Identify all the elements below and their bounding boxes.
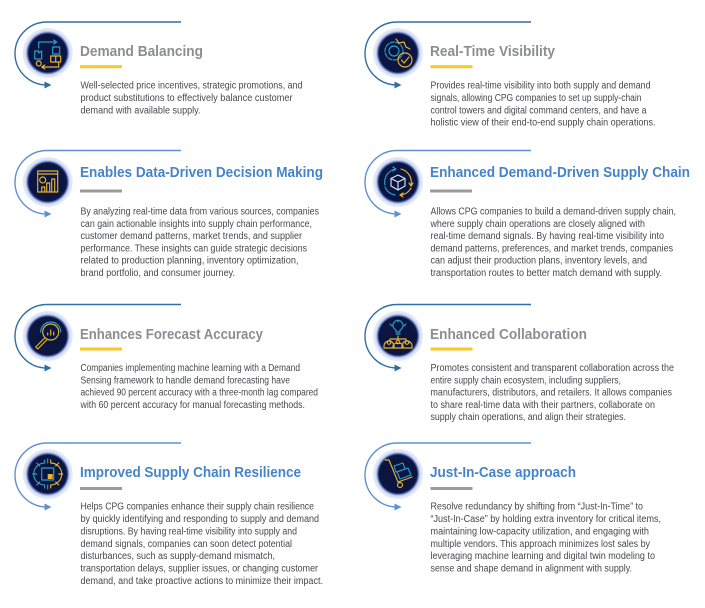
- heading underline: [430, 190, 472, 192]
- text block: Resolve redundancy by shifting from “Just-In-Time” to: [430, 502, 643, 512]
- heading underline: [430, 65, 472, 68]
- text block: entire supply chain ecosystem, including suppliers,: [430, 375, 621, 386]
- text block: [430, 363, 674, 423]
- text block: Promotes consistent and transparent collaboration across the: [430, 363, 674, 374]
- heading: Enables Data-Driven Decision Making: [80, 165, 323, 181]
- text block: [430, 502, 661, 574]
- text block: product substitutions to effectively balance customer: [80, 93, 293, 104]
- arrow: curved connector: [365, 22, 531, 88]
- text block: can gain actionable insights into supply chain performance,: [80, 219, 312, 230]
- text block: transportation routes to better match demand with supply.: [430, 268, 662, 279]
- text block: real-time demand signals. By having real-time visibility into: [430, 231, 664, 242]
- heading: Enhances Forecast Accuracy: [80, 327, 263, 343]
- text block: sense and shape demand in alignment with supply.: [430, 564, 632, 574]
- text block: Allows CPG companies to build a demand-driven supply chain,: [430, 206, 676, 218]
- heading underline: [80, 190, 122, 192]
- panel: Improved Supply Chain Resilience: [15, 443, 323, 587]
- heading: Demand Balancing: [80, 44, 203, 60]
- heading: Enhanced Demand-Driven Supply Chain: [430, 165, 690, 181]
- text block: achieved 90 percent accuracy with a three-month lag compared: [80, 388, 318, 399]
- text block: [430, 206, 676, 279]
- heading underline: [430, 348, 472, 350]
- panel: Just-In-Case approach: [365, 443, 661, 574]
- heading underline: [80, 348, 122, 350]
- text block: [80, 206, 319, 279]
- text block: Helps CPG companies enhance their supply chain resilience: [80, 502, 314, 512]
- icon: hand truck with boxes: [373, 449, 423, 499]
- text block: Well-selected price incentives, strategic promotions, and: [80, 80, 302, 92]
- panel: Enhanced Collaboration: [365, 304, 674, 423]
- heading underline: [430, 487, 472, 490]
- panel: Enhanced Demand-Driven Supply Chain: [365, 150, 690, 279]
- arrow: curved connector: [15, 150, 181, 218]
- text block: disturbances, such as supply-demand mismatch,: [80, 551, 275, 562]
- panel: Demand Balancing: [15, 22, 302, 116]
- text block: to share real-time data with their partners, collaborate on: [430, 400, 655, 411]
- text block: demand patterns, preferences, and market trends, companies: [430, 243, 673, 254]
- text block: control towers and digital command centers, and have a: [430, 105, 647, 116]
- text block: related to production planning, inventory optimization,: [80, 256, 298, 267]
- heading underline: [80, 487, 122, 490]
- text block: transportation delays, supplier issues, or changing customer: [80, 564, 319, 574]
- heading: Improved Supply Chain Resilience: [80, 465, 301, 481]
- icon: gears with check: [373, 28, 423, 78]
- text block: performance. These insights can guide strategic decisions: [80, 243, 307, 254]
- text block: brand portfolio, and consumer journey.: [80, 268, 235, 279]
- arrow: curved connector: [15, 304, 181, 372]
- text block: disruptions. By having real-time visibility into supply and: [80, 526, 297, 537]
- text block: customer demand patterns, market trends, and supplier: [80, 231, 303, 242]
- text block: leveraging machine learning and digital twin modeling to: [430, 551, 655, 562]
- text block: with 60 percent accuracy for manual forecasting methods.: [80, 400, 305, 411]
- text block: where supply chain operations are closely aligned with: [430, 219, 645, 230]
- icon: package in cycle: [373, 157, 423, 207]
- arrow: curved connector: [365, 443, 531, 510]
- text block: [430, 80, 656, 129]
- heading: Real-Time Visibility: [430, 44, 555, 60]
- text block: demand, and take proactive actions to minimize their impact.: [80, 576, 323, 587]
- text block: supply chain operations, and align their strategies.: [430, 412, 626, 423]
- arrow: curved connector: [15, 22, 181, 88]
- text block: holistic view of their end-to-end supply chain operations.: [430, 118, 656, 129]
- icon: analytics dashboard: [23, 157, 73, 207]
- heading underline: [80, 65, 122, 68]
- heading: Just-In-Case approach: [430, 465, 576, 481]
- text block: manufacturers, distributors, and retailers. It allows companies: [430, 388, 672, 399]
- text block: “Just-In-Case” by holding extra inventory for critical items,: [430, 514, 661, 525]
- text block: Companies implementing machine learning with a Demand: [80, 363, 300, 374]
- panel: Real-Time Visibility: [365, 22, 656, 129]
- text block: maintaining low-capacity utilization, and engaging with: [430, 526, 649, 537]
- heading: Enhanced Collaboration: [430, 327, 587, 343]
- arrow: curved connector: [365, 304, 531, 372]
- arrow: curved connector: [15, 443, 181, 510]
- icon: gear with box: [23, 449, 73, 499]
- panel: Enhances Forecast Accuracy: [15, 304, 318, 411]
- text block: by quickly identifying and responding to supply and demand: [80, 514, 319, 525]
- icon: balancing flow: [23, 28, 73, 78]
- icon: light bulb and team: [373, 311, 423, 361]
- panel: Enables Data-Driven Decision Making: [15, 150, 323, 279]
- text block: [80, 502, 323, 587]
- text block: demand signals, companies can soon detect potential: [80, 539, 292, 550]
- text block: signals, allowing CPG companies to set up supply-chain: [430, 93, 642, 104]
- text block: demand with available supply.: [80, 105, 200, 116]
- text block: Sensing framework to handle demand forecasting have: [80, 375, 290, 386]
- text block: [80, 363, 318, 411]
- arrow: curved connector: [365, 150, 531, 218]
- icon: magnifying glass: [23, 311, 73, 361]
- text block: Provides real-time visibility into both supply and demand: [430, 80, 650, 92]
- text block: [80, 80, 302, 116]
- text block: By analyzing real-time data from various sources, companies: [80, 206, 319, 218]
- text block: can adjust their production plans, inventory levels, and: [430, 256, 647, 267]
- text block: multiple vendors. This approach minimizes lost sales by: [430, 539, 650, 550]
